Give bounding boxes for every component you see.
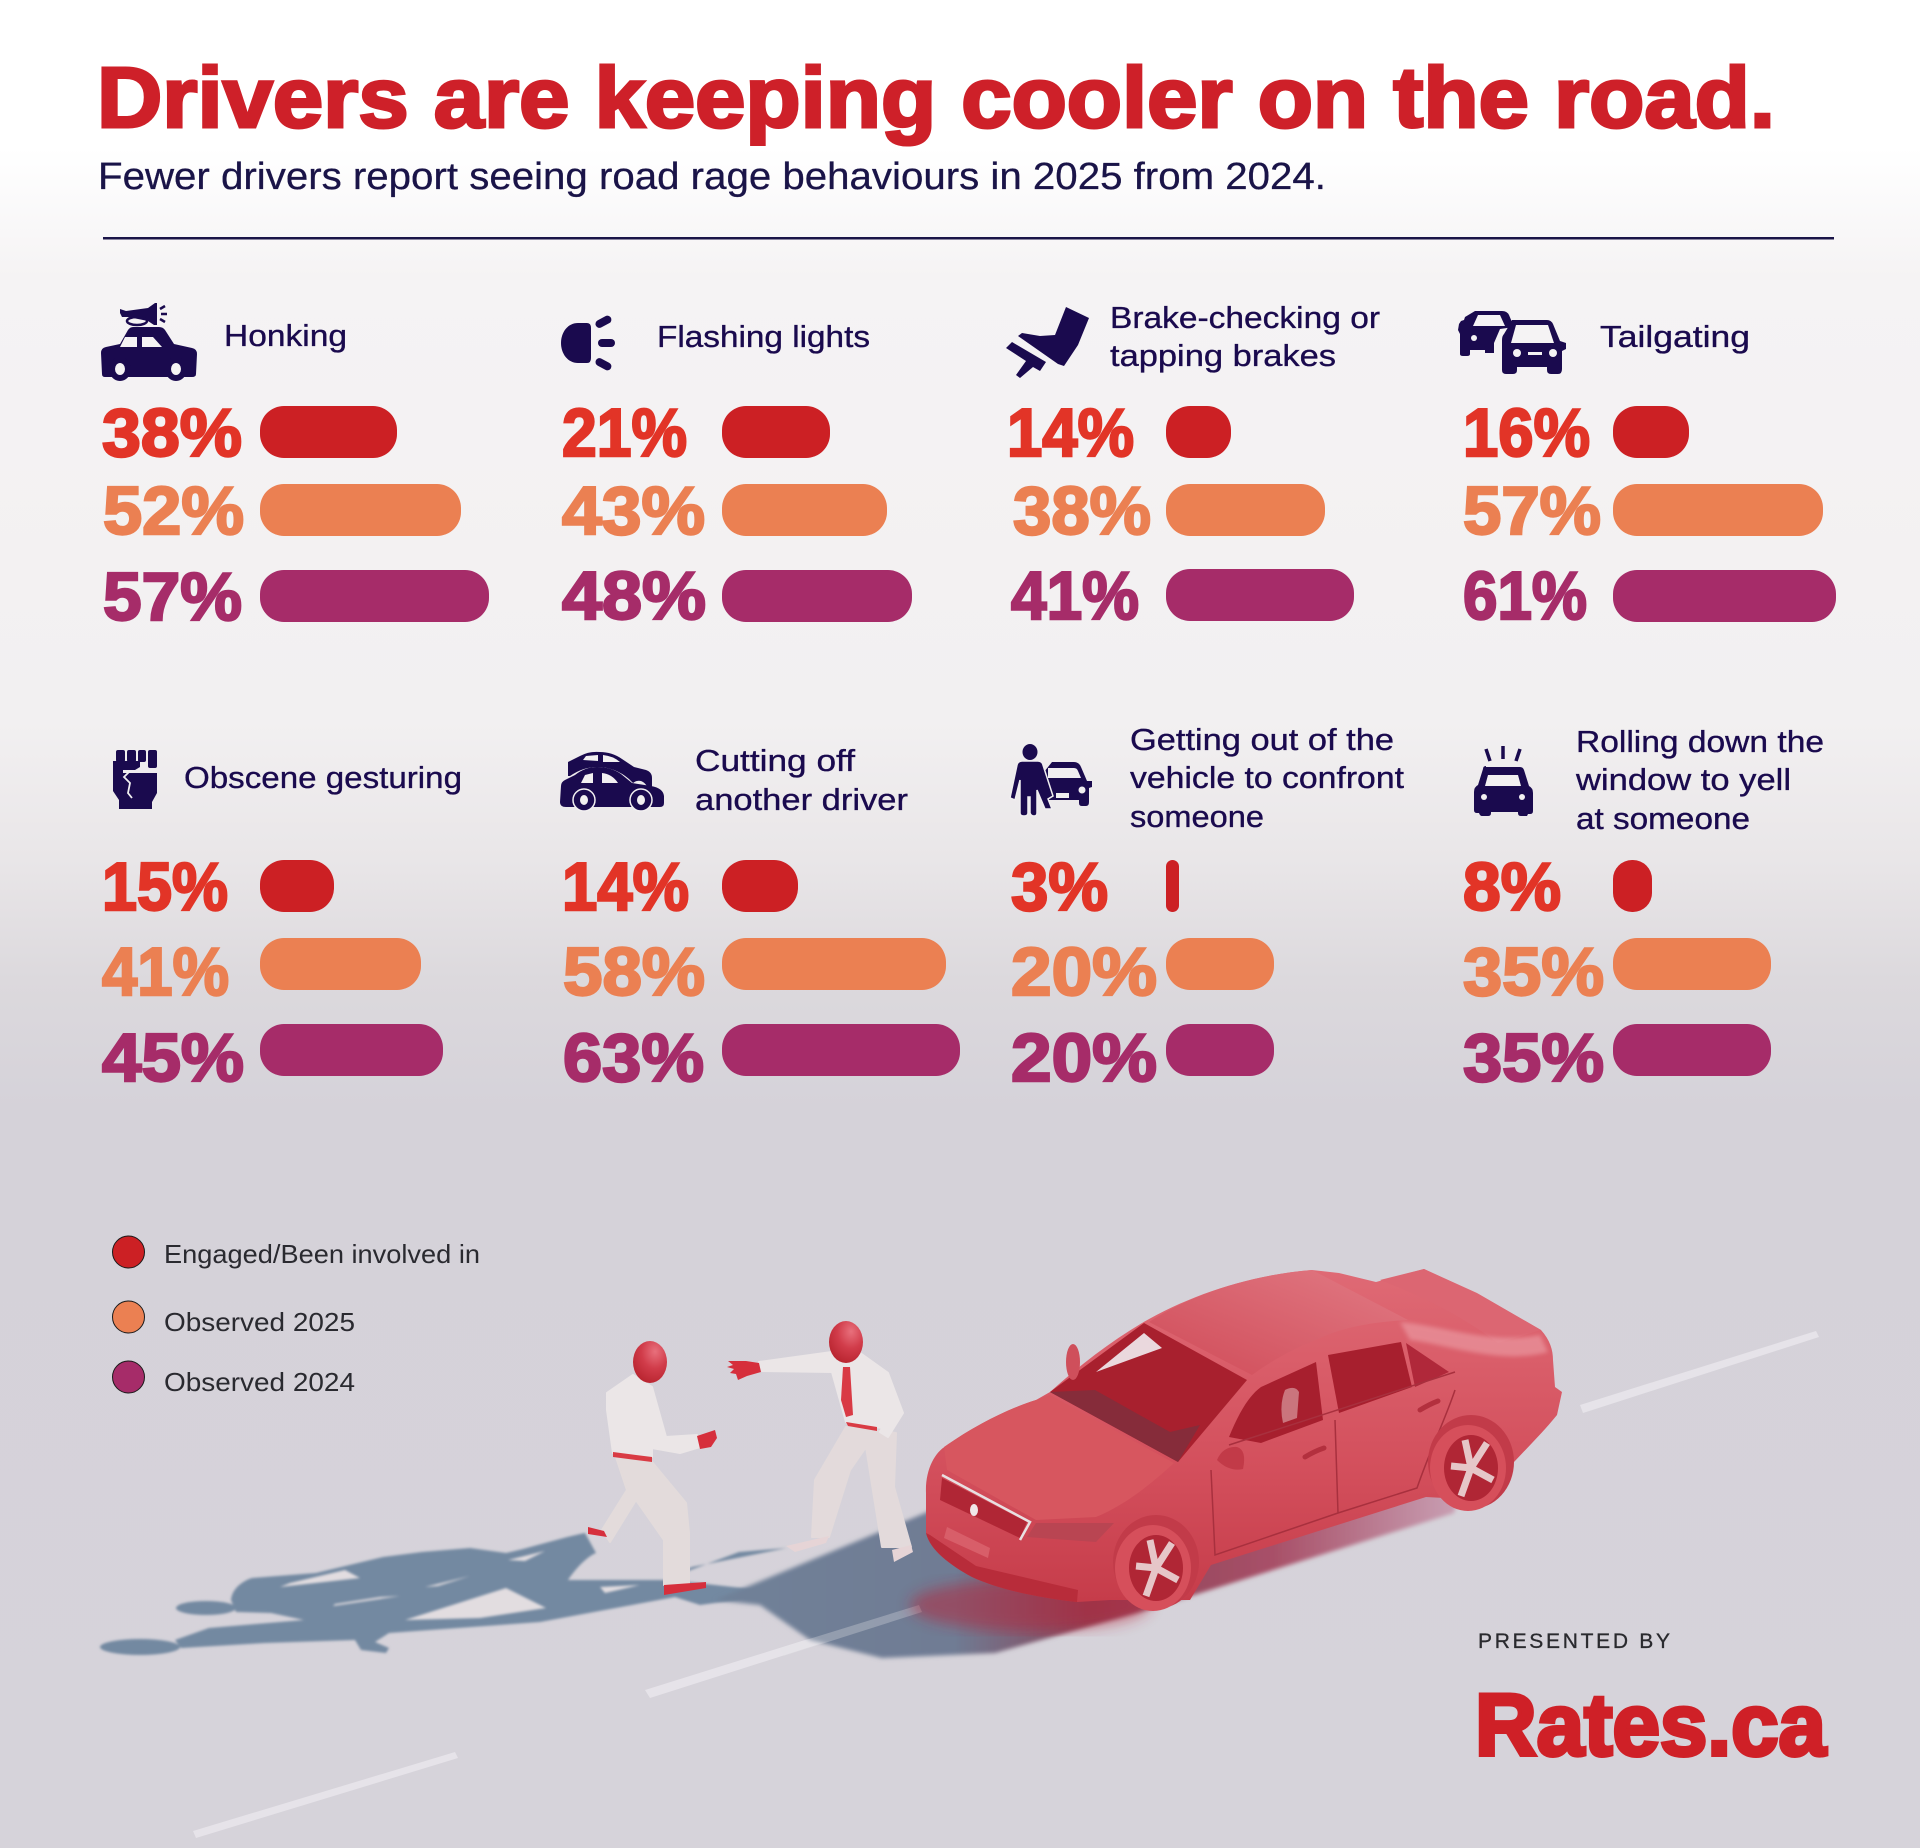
value: 48 percent observed 2024: 48% [562,558,706,634]
value: 57 percent observed 2025: 57% [1463,473,1601,549]
label: getting out of the: Getting out of the [1130,722,1394,757]
label: brake-checking: Brake-checking or [1110,300,1380,335]
label: tailgating: Tailgating [1600,319,1750,354]
road markings [193,1331,1819,1838]
belt [846,1422,877,1431]
belt [613,1452,652,1462]
front wheel [1115,1525,1191,1611]
wheel arches [1113,1515,1199,1609]
hood [944,1395,1174,1520]
panel: rolling down the window [1463,724,1824,1096]
illustration: road, people and car [100,1269,1819,1838]
head [829,1321,863,1363]
door handles [1305,1401,1438,1457]
label: window to yell: window to yell [1575,762,1791,797]
legend: observed 2025: Observed 2025 [164,1307,355,1337]
value: 15 percent engaged: 15% [102,849,228,925]
door lines [1211,1372,1455,1555]
value: 43 percent observed 2025: 43% [562,473,705,549]
bar: 48 percent [722,570,912,622]
car shadow [715,1480,1460,1658]
bar: 35 percent observed 2024 [1613,1024,1771,1076]
bar: 41 percent [260,938,421,990]
value: 16 percent engaged: 16% [1463,395,1590,471]
value: 38 percent engaged: 38% [102,395,242,471]
rear deck [1380,1269,1541,1343]
value: 52 percent observed 2025: 52% [103,473,244,549]
bar: 15 percent [260,860,334,912]
icon: honking car [101,303,197,381]
bar: 57 percent [1613,484,1823,536]
lower bumper [926,1533,1078,1602]
bar: 20 percent observed 2025 [1166,938,1274,990]
hand and shoes [588,1430,717,1595]
panel: brake-checking [1006,300,1380,634]
label: vehicle to confront: vehicle to confront [1130,760,1404,795]
value: 35 percent observed 2024: 35% [1463,1020,1604,1096]
shirt [759,1352,903,1437]
panel: tailgating [1458,311,1836,634]
legend: observed 2025 [112,1301,355,1337]
trousers [812,1427,911,1547]
icon: two cars tailgating [1458,311,1566,374]
label: flashing lights: Flashing lights [657,319,870,354]
licence plate [944,1527,990,1558]
bar: 43 percent [722,484,887,536]
panel: flashing lights [561,314,912,634]
road marking over shadow [780,1605,922,1656]
value: 21 percent engaged: 21% [562,395,687,471]
bar: 14 percent [722,860,798,912]
shadow gaps [280,1551,640,1620]
label: tapping brakes: tapping brakes [1110,338,1336,373]
side windows [1229,1362,1323,1443]
label: obscene gesturing: Obscene gesturing [184,760,462,795]
car body [926,1269,1562,1602]
icon: raised fist [113,750,157,809]
value: 20 percent observed 2024: 20% [1011,1020,1157,1096]
hand [727,1361,761,1380]
subtitle: Fewer drivers report seeing road rage behaviours in 2025 from 2024. [98,156,1326,198]
label: rolling down the: Rolling down the [1576,724,1824,759]
bar: 63 percent [722,1024,960,1076]
bar: 41 percent [1166,569,1354,621]
value: 63 percent observed 2024: 63% [563,1020,704,1096]
bar: 8 percent [1613,860,1652,912]
value: 3 percent engaged: 3% [1011,849,1108,925]
presented by: PRESENTED BY [1478,1630,1670,1653]
value: 45 percent observed 2024: 45% [102,1020,244,1096]
label: honking: Honking [224,318,347,353]
grille [940,1478,1027,1538]
legend [112,1236,480,1397]
icon: flashing lights [561,314,615,372]
value: 41 percent observed 2024: 41% [1011,558,1139,634]
bar: 58 percent [722,938,946,990]
value: 58 percent observed 2025: 58% [563,934,705,1010]
panel: getting out of the vehicle [1010,722,1404,1096]
title: Drivers are keeping cooler on the road. [97,51,1775,146]
bar: 38 percent [1166,484,1325,536]
panel: obscene gesturing [102,750,462,1096]
legend: observed 2024 [112,1361,355,1397]
head [633,1341,667,1383]
people shadows [100,1533,787,1655]
person right [727,1321,913,1562]
label: at someone: at someone [1576,801,1750,836]
tie [841,1367,853,1417]
shoulder highlight [1400,1322,1548,1356]
headlight [1027,1523,1114,1542]
bar: 20 percent observed 2024 [1166,1024,1274,1076]
icon: car with shouting lines [1474,746,1533,816]
rear wheel [1430,1425,1506,1511]
bar: 35 percent observed 2025 [1613,938,1771,990]
roof [1149,1270,1408,1375]
value: 38 percent observed 2025: 38% [1013,473,1151,549]
legend: engaged: Engaged/Been involved in [164,1239,480,1269]
bar: 3 percent [1166,860,1179,912]
bar: 57 percent [260,570,489,622]
label: someone: someone [1130,799,1264,834]
label: cutting off: Cutting off [695,743,855,778]
value: 41 percent observed 2025: 41% [102,934,229,1010]
value: 14 percent engaged: 14% [562,849,689,925]
panel: cutting off [560,743,960,1096]
icon: car cutting off another car [560,752,664,811]
value: 8 percent engaged: 8% [1463,849,1561,925]
logo: Rates.ca: Rates.ca [1475,1675,1827,1774]
shoes [786,1536,913,1562]
bar: 45 percent [260,1024,443,1076]
windshield [1050,1323,1247,1462]
bar: 38 percent [260,406,397,458]
icon: foot on brake pedal [1006,307,1089,378]
side mirror [1217,1447,1244,1470]
bar: 16 percent [1613,406,1689,458]
label: another driver: another driver [695,782,908,817]
trousers [602,1457,689,1585]
bar: 21 percent [722,406,830,458]
bar: 52 percent [260,484,461,536]
car [926,1269,1562,1611]
value: 20 percent observed 2025: 20% [1011,934,1157,1010]
bar: 61 percent [1613,570,1836,622]
person left [588,1341,717,1595]
legend: observed 2024: Observed 2024 [164,1367,355,1397]
icon: person beside car [1010,744,1092,816]
value: 35 percent observed 2025: 35% [1463,934,1604,1010]
value: 57 percent observed 2024: 57% [103,559,242,635]
shirt [607,1375,700,1457]
value: 61 percent observed 2024: 61% [1463,558,1587,634]
bar: 14 percent [1166,406,1231,458]
value: 14 percent engaged: 14% [1007,395,1134,471]
panel: honking [101,303,489,635]
